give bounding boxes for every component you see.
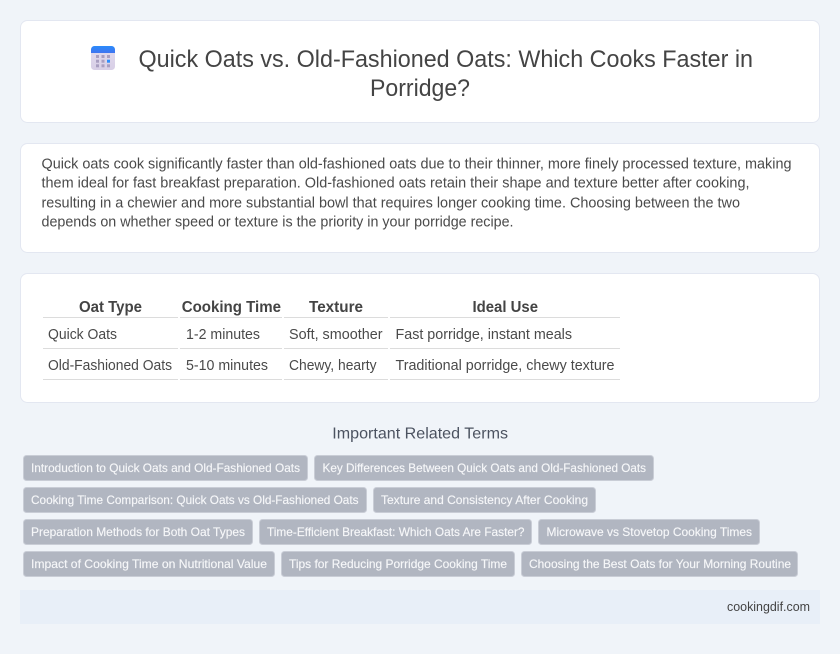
table row: old-fashioned oats: Old-Fashioned Oats bbox=[48, 358, 172, 374]
related term tags: Choosing the Best Oats for Your Morning Routine bbox=[529, 557, 791, 571]
panel: summary paragraph bbox=[20, 144, 820, 252]
related term tags: Preparation Methods for Both Oat Types bbox=[31, 525, 245, 539]
table row: old-fashioned oats: 5-10 minutes bbox=[186, 358, 268, 374]
table row: old-fashioned oats bbox=[43, 358, 620, 380]
title bbox=[138, 46, 753, 102]
table row: quick oats: Soft, smoother bbox=[289, 327, 383, 343]
table header row: Oat Type bbox=[79, 299, 142, 316]
summary text: them ideal for fast breakfast preparation. Old-fashioned oats retain their shape and texture better after cooking, bbox=[42, 176, 750, 192]
related term tags: Key Differences Between Quick Oats and Old-Fashioned Oats bbox=[322, 461, 646, 475]
table row: old-fashioned oats: Traditional porridge, chewy texture bbox=[396, 358, 614, 374]
table header row: Ideal Use bbox=[472, 299, 538, 316]
table header row bbox=[43, 299, 620, 318]
related term tags: Microwave vs Stovetop Cooking Times bbox=[546, 525, 752, 539]
table row: quick oats: Fast porridge, instant meals bbox=[396, 327, 572, 343]
icon: calendar bbox=[91, 46, 115, 70]
related term tags: Tips for Reducing Porridge Cooking Time bbox=[289, 557, 507, 571]
summary text: depends on whether speed or texture is the priority in your porridge recipe. bbox=[42, 215, 514, 231]
footer source: cookingdif.com bbox=[727, 600, 810, 614]
heading: related terms: Important Related Terms bbox=[332, 425, 508, 442]
table header row: Texture bbox=[309, 299, 363, 316]
summary text: Quick oats cook significantly faster than old-fashioned oats due to their thinner, more finely processed texture, making bbox=[42, 156, 792, 172]
summary text bbox=[42, 156, 792, 231]
related term tags: Texture and Consistency After Cooking bbox=[381, 493, 588, 507]
related term tags: Impact of Cooking Time on Nutritional Value bbox=[31, 557, 267, 571]
table row: quick oats: Quick Oats bbox=[48, 327, 117, 343]
table row: quick oats: 1-2 minutes bbox=[186, 327, 260, 343]
related term tags bbox=[24, 456, 798, 576]
table row: old-fashioned oats: Chewy, hearty bbox=[289, 358, 377, 374]
table row: quick oats bbox=[43, 327, 620, 348]
panel: comparison table bbox=[20, 274, 820, 402]
summary text: resulting in a chewier and more substantial bowl that requires longer cooking time. Choosing between the two bbox=[42, 195, 740, 211]
title: Porridge? bbox=[370, 75, 470, 102]
footer bar bbox=[20, 590, 820, 624]
related term tags: Cooking Time Comparison: Quick Oats vs Old-Fashioned Oats bbox=[31, 493, 358, 507]
related term tags: Introduction to Quick Oats and Old-Fashioned Oats bbox=[31, 461, 300, 475]
panel: title header bbox=[20, 20, 820, 122]
related term tags: Time-Efficient Breakfast: Which Oats Are Faster? bbox=[267, 525, 525, 539]
title: Quick Oats vs. Old-Fashioned Oats: Which Cooks Faster in bbox=[138, 46, 753, 73]
table header row: Cooking Time bbox=[182, 299, 281, 316]
